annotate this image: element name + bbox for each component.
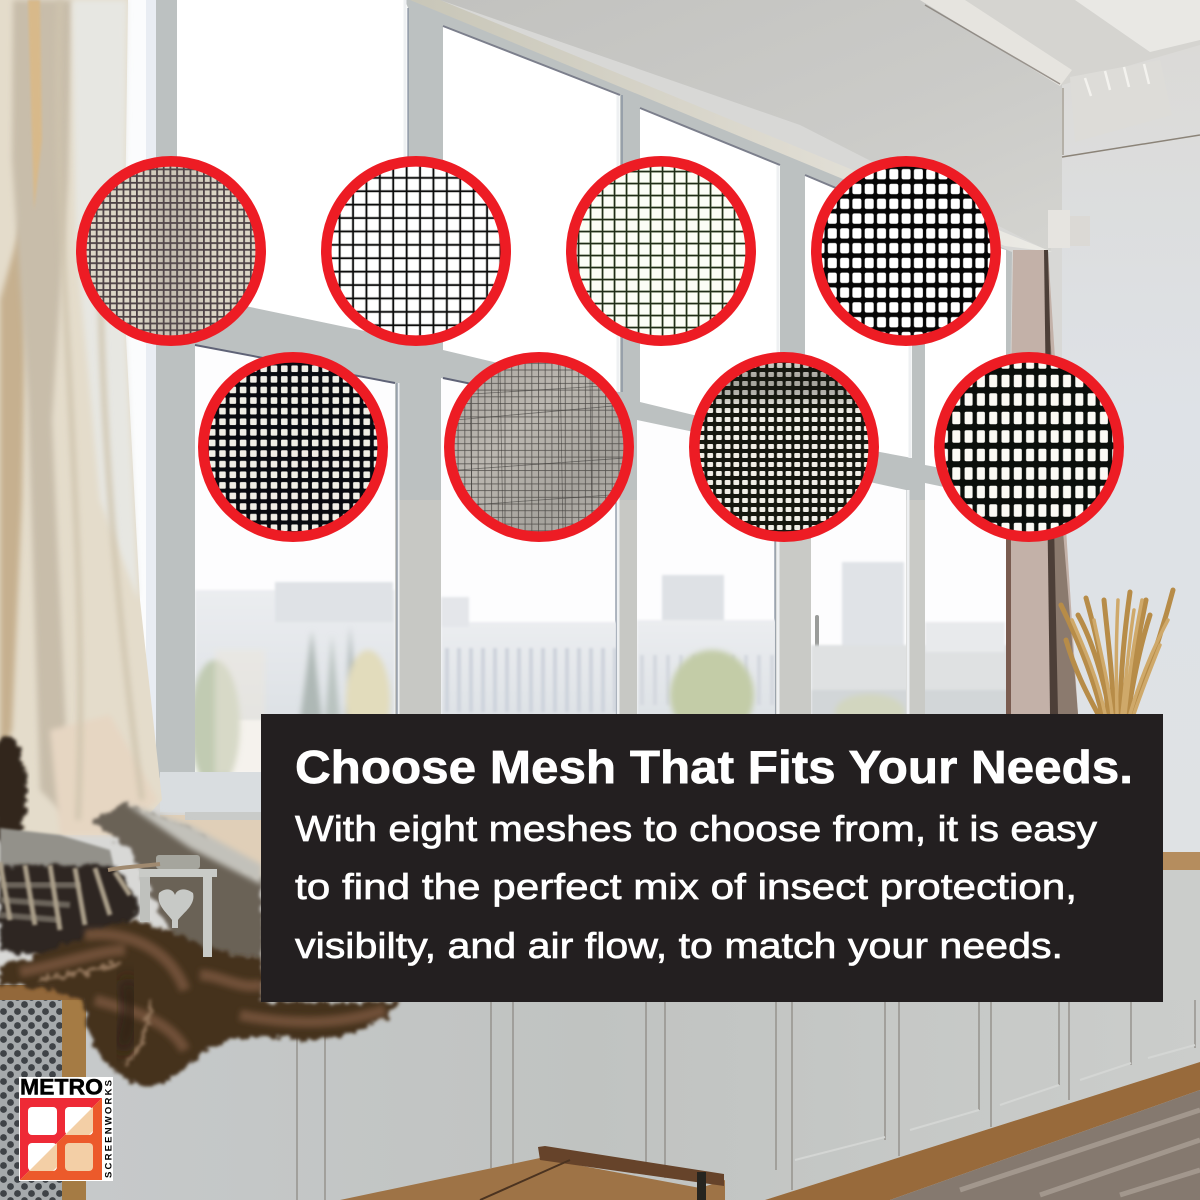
pillow	[92, 803, 262, 960]
dotted radiator panel	[0, 995, 62, 1200]
mesh sample 1: fine tan mesh	[76, 156, 266, 346]
body text: to find the perfect mix of insect protection,	[295, 866, 1077, 907]
logo: Metro Screenworks: METRO	[20, 1074, 103, 1100]
ceiling beam	[920, 0, 1072, 86]
upper wall	[440, 0, 1062, 252]
mesh sample 8: wide weave black mesh	[934, 352, 1124, 542]
heading: Choose Mesh That Fits Your Needs.	[295, 741, 1133, 793]
mesh sample 2: open black grid	[321, 156, 511, 346]
lower sill	[160, 772, 262, 815]
mesh sample 6: fine grey mesh	[444, 352, 634, 542]
mesh sample 5: black mesh	[198, 352, 388, 542]
cabinet top right	[1163, 852, 1200, 870]
mesh sample 3: open green grid	[566, 156, 756, 346]
logo: Metro Screenworks: SCREENWORKS	[104, 1080, 114, 1178]
right wall	[1062, 45, 1200, 860]
frame highlights	[398, 0, 910, 772]
brown fur	[0, 920, 400, 1087]
wood post	[62, 1000, 86, 1200]
body text	[295, 808, 1097, 966]
ceiling	[900, 0, 1200, 90]
mesh sample 7: dense dark mesh	[689, 352, 879, 542]
skirting board	[765, 1062, 1200, 1200]
lower frame uprights	[395, 500, 441, 780]
dried plant	[1061, 590, 1173, 714]
body text: visibilty, and air flow, to match your needs.	[295, 925, 1063, 966]
mesh samples row 2	[198, 352, 1124, 542]
window glass and frame	[125, 0, 1052, 880]
cream frame band	[410, 0, 1052, 252]
blankets and fur on window seat	[0, 735, 400, 1087]
right curtain	[1006, 250, 1078, 714]
left curtain	[0, 0, 162, 835]
mesh sample 4: heavy black mesh	[811, 156, 1001, 346]
logo: Metro Screenworks	[19, 1074, 114, 1181]
folded blanket	[0, 828, 115, 872]
distant city skyline	[190, 562, 1011, 790]
lower panes	[195, 345, 395, 772]
upper panes	[177, 0, 408, 340]
wooden crate	[340, 1146, 725, 1200]
floor	[890, 1090, 1200, 1200]
cabinets	[85, 1000, 1200, 1200]
text panel	[261, 714, 1163, 1002]
heart lantern	[108, 855, 217, 957]
body text: With eight meshes to choose from, it is easy	[295, 808, 1097, 849]
mesh samples row 1	[76, 156, 1001, 346]
